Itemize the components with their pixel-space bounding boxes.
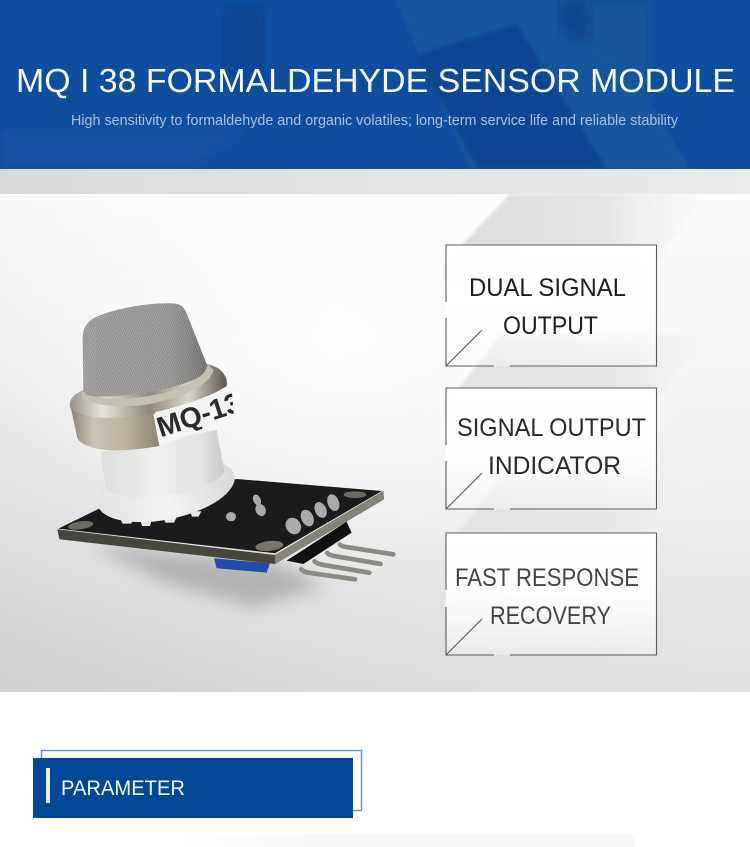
label text: MQ-13 <box>153 387 245 444</box>
title: MQ I 38 FORMALDEHYDE SENSOR MODULE <box>16 62 735 99</box>
section heading: parameter: PARAMETER <box>61 777 185 800</box>
board shadow <box>90 543 327 607</box>
feature box: signal output indicator <box>446 388 657 509</box>
grey band <box>0 169 750 194</box>
pins <box>301 545 393 579</box>
feature box: fast response recovery: RECOVERY <box>490 602 611 630</box>
metal ring <box>71 408 161 450</box>
feature box: signal output indicator: SIGNAL OUTPUT <box>457 414 646 442</box>
mesh cap <box>83 303 207 397</box>
blue potentiometer <box>214 558 270 573</box>
board top <box>58 479 382 553</box>
label strip <box>153 390 234 446</box>
feature box: dual signal output: DUAL SIGNAL <box>469 274 626 302</box>
panel: product and features <box>0 194 750 692</box>
subtitle: High sensitivity to formaldehyde and organic volatiles; long-term service life and reliable stability <box>71 113 679 129</box>
mounting holes <box>68 520 94 531</box>
ceramic body <box>101 430 224 497</box>
product photo: MQ-138 sensor module <box>57 303 393 607</box>
feature box: fast response recovery <box>446 533 657 655</box>
board edge <box>57 491 384 564</box>
solder joints <box>226 493 342 537</box>
feature box: fast response recovery: FAST RESPONSE <box>455 564 639 592</box>
faint table top edge <box>180 835 635 847</box>
feature box: signal output indicator: INDICATOR <box>488 452 621 480</box>
feature box: dual signal output: OUTPUT <box>503 312 598 340</box>
header banner <box>0 0 750 169</box>
pin header <box>287 522 352 564</box>
metal collar <box>70 364 227 418</box>
ceramic flange <box>120 511 201 526</box>
feature box: dual signal output <box>446 245 657 366</box>
section heading: parameter <box>33 750 362 818</box>
